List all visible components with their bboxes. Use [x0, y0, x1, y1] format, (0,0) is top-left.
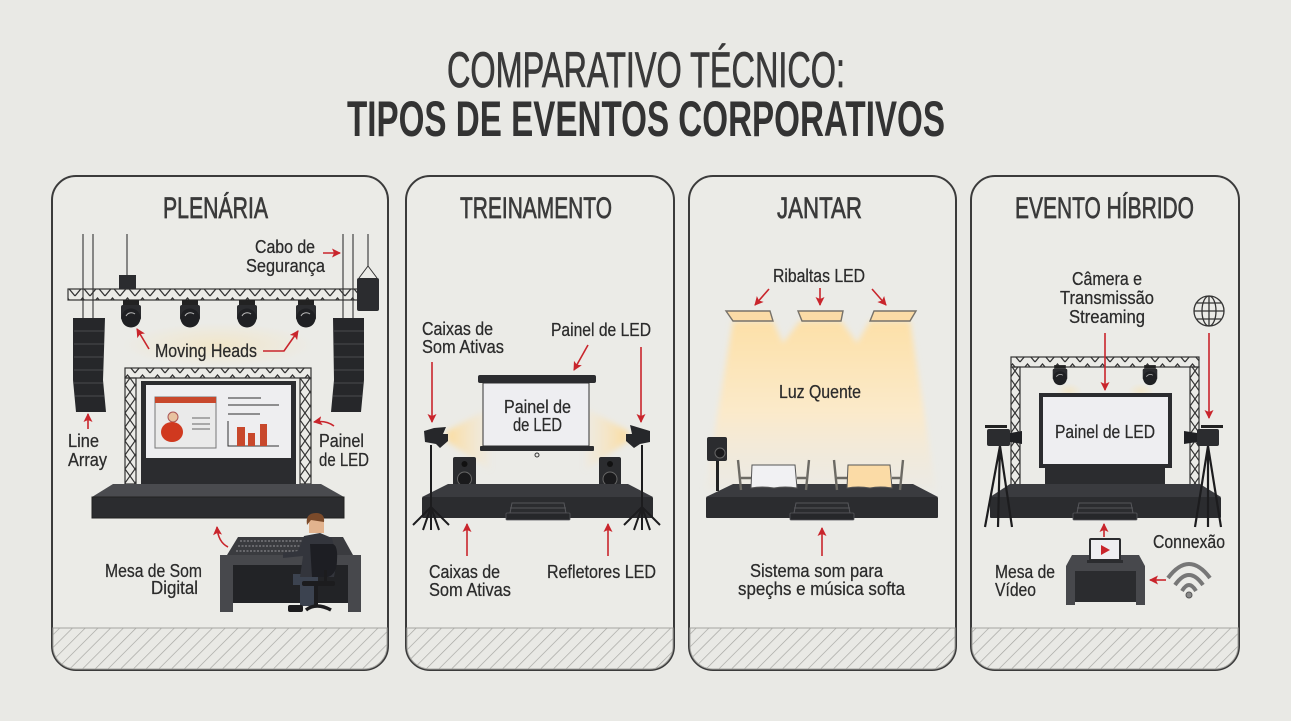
panel: evento híbrido	[971, 176, 1239, 670]
led panel: Painel de LED	[1055, 422, 1155, 442]
floor hatch	[407, 628, 673, 669]
hanging cables	[83, 234, 368, 318]
label: luz quente: Luz Quente	[779, 382, 861, 402]
label: mesa de vídeo	[995, 562, 1055, 600]
label: line array	[68, 414, 107, 470]
label: caixas de som top: Caixas de	[422, 319, 493, 339]
label: câmera e transmissão: Câmera e	[1072, 269, 1142, 289]
label: sistema de som	[738, 528, 906, 599]
bar chart slide	[228, 398, 279, 446]
hanging weight	[357, 266, 379, 311]
arrows to panel and camera	[1105, 333, 1209, 418]
screen text	[504, 397, 571, 435]
screen text: de LED	[513, 415, 562, 435]
label: cabo de segurança: Segurança	[246, 256, 326, 276]
label: mesa de som digital: Mesa de Som	[105, 561, 202, 581]
label: cabo de segurança: Cabo de	[255, 237, 315, 257]
label: moving heads: Moving Heads	[155, 341, 257, 361]
stage	[422, 484, 653, 520]
truss frame	[1011, 357, 1199, 485]
projection screen	[478, 375, 596, 457]
floor hatch	[690, 628, 955, 669]
moving heads	[1053, 365, 1157, 399]
icon: globe	[1194, 296, 1224, 326]
label: painel de led: Painel	[319, 431, 364, 451]
label: cabo de segurança	[246, 237, 340, 276]
label: line array: Array	[68, 450, 107, 470]
moving heads	[121, 300, 316, 328]
truss	[68, 275, 358, 300]
led panel	[1041, 395, 1170, 485]
label: painel de led	[314, 422, 369, 470]
label: sistema de som: Sistema som para	[750, 561, 884, 581]
right camera on tripod	[1184, 425, 1223, 527]
panel: jantar	[689, 176, 956, 670]
label: mesa de som digital: Digital	[151, 578, 198, 598]
label: refletores led: Refletores LED	[547, 562, 656, 582]
label: mesa de som digital	[105, 527, 228, 598]
label: caixas de som top	[422, 319, 504, 422]
stage truss frame	[125, 368, 311, 484]
sound desk and operator	[220, 513, 361, 612]
label: line array: Line	[68, 431, 99, 451]
right lamp on tripod	[624, 425, 660, 530]
light glow	[123, 323, 313, 367]
label: câmera e transmissão: Streaming	[1069, 307, 1145, 327]
heading: jantar: JANTAR	[777, 192, 862, 225]
video desk with laptop	[1066, 524, 1145, 605]
left lamp on tripod	[413, 427, 449, 530]
led footlights	[726, 311, 916, 321]
panel: plenária	[52, 176, 388, 670]
floor hatch	[53, 628, 387, 669]
label: caixas de som top: Som Ativas	[422, 337, 504, 357]
stage	[990, 484, 1221, 520]
label: mesa de vídeo: Vídeo	[995, 580, 1036, 600]
line array left	[73, 318, 106, 412]
label: ribaltas led	[755, 266, 886, 305]
label: refletores led	[547, 524, 656, 582]
panel: treinamento	[406, 176, 674, 670]
speakers	[453, 457, 621, 491]
title: TIPOS DE EVENTOS CORPORATIVOS	[347, 91, 945, 147]
warm beams	[447, 408, 628, 470]
label: caixas de som bottom: Caixas de	[429, 562, 500, 582]
title: COMPARATIVO TÉCNICO:	[447, 42, 845, 98]
led panel	[141, 381, 296, 484]
label: câmera e transmissão: Transmissão	[1060, 288, 1154, 308]
label: câmera e transmissão	[1060, 269, 1154, 327]
label: painel de led top: Painel de LED	[551, 320, 651, 340]
label: ribaltas led: Ribaltas LED	[773, 266, 865, 286]
label: moving heads	[137, 329, 298, 361]
heading: evento híbrido: EVENTO HÍBRIDO	[1015, 192, 1194, 225]
line array right	[331, 318, 364, 412]
speaker on pole	[707, 437, 727, 491]
label: mesa de vídeo: Mesa de	[995, 562, 1055, 582]
label: caixas de som bottom	[429, 524, 511, 600]
label: sistema de som: speçhs e música softa	[738, 579, 906, 599]
arrow: wifi to desk	[1150, 579, 1166, 581]
screen text: Painel de	[504, 397, 571, 417]
heading: treinamento: TREINAMENTO	[460, 192, 612, 225]
dinner tables and chairs	[738, 460, 903, 490]
stage	[92, 484, 344, 518]
floor hatch	[972, 628, 1238, 669]
label: caixas de som bottom: Som Ativas	[429, 580, 511, 600]
left camera on tripod	[985, 425, 1022, 527]
label: connexão: Connexão	[1153, 532, 1225, 552]
warm light cones	[705, 321, 936, 490]
heading: plenária: PLENÁRIA	[163, 192, 268, 225]
title	[347, 42, 945, 147]
icon: wifi	[1168, 564, 1210, 598]
presenter slide	[155, 397, 216, 448]
label: painel de led top	[551, 320, 651, 422]
stage	[706, 484, 938, 520]
label: painel de led: de LED	[319, 450, 369, 470]
